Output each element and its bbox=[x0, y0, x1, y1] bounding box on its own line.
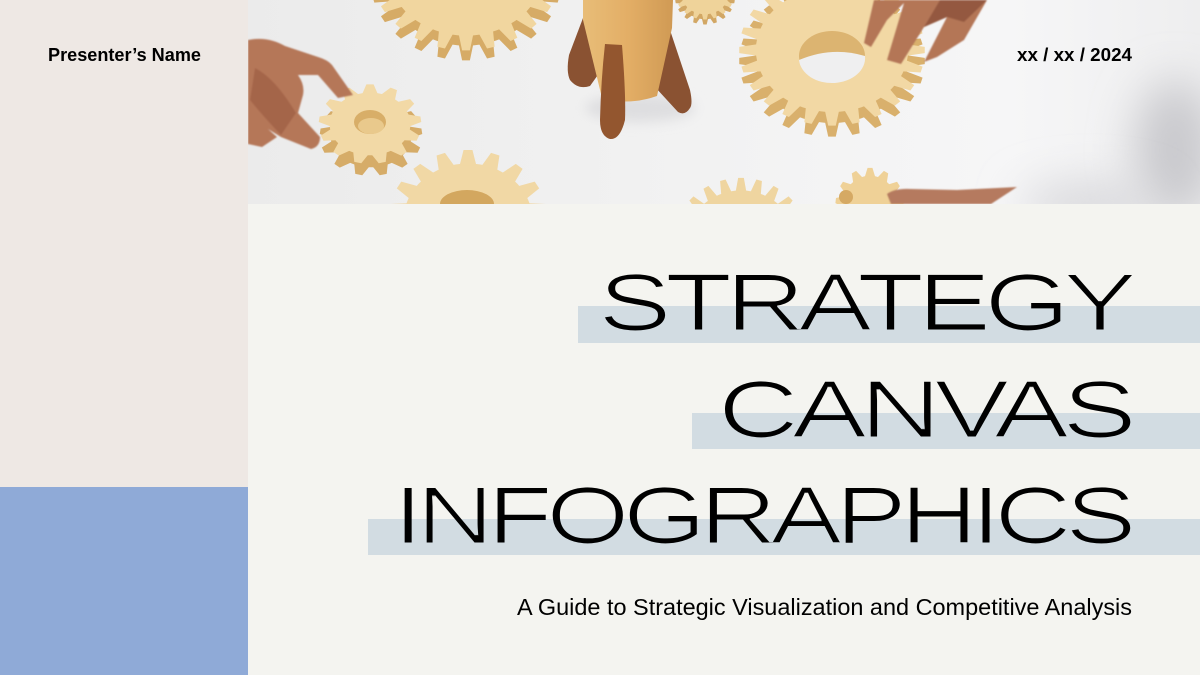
rocket body bbox=[583, 0, 673, 102]
hand: top right bbox=[864, 0, 987, 64]
hand: bottom right bbox=[887, 187, 1017, 204]
rocket front fin bbox=[600, 44, 625, 139]
gear: bottom centre left bbox=[388, 150, 548, 290]
title bbox=[393, 260, 1135, 560]
subtitle: A Guide to Strategic Visualization and Competitive Analysis bbox=[517, 594, 1132, 620]
photo: wooden gears, rocket and hands bbox=[248, 0, 1200, 204]
date: xx / xx / 2024 bbox=[1017, 45, 1132, 65]
panel: blue sidebar block bbox=[0, 487, 248, 675]
rocket bbox=[568, 0, 692, 139]
panel: beige sidebar bbox=[0, 0, 248, 487]
highlight bar: infographics bbox=[368, 519, 1200, 555]
title: CANVAS bbox=[718, 363, 1132, 454]
rocket left fin bbox=[568, 18, 600, 87]
highlight bar: strategy bbox=[578, 306, 1200, 343]
gear: behind rocket top right bbox=[675, 0, 735, 24]
gear: large top left bbox=[370, 0, 562, 60]
gear: small held by left hand bbox=[318, 84, 423, 176]
gear: large right bbox=[739, 0, 925, 137]
gear: bottom right small bbox=[835, 168, 905, 242]
hand: left bbox=[248, 39, 353, 149]
rocket right fin bbox=[655, 27, 692, 113]
highlight bar: canvas bbox=[692, 413, 1200, 449]
title: INFOGRAPHICS bbox=[393, 471, 1133, 560]
gear: bottom middle bbox=[671, 178, 811, 318]
presenter name: Presenter’s Name bbox=[48, 45, 201, 65]
